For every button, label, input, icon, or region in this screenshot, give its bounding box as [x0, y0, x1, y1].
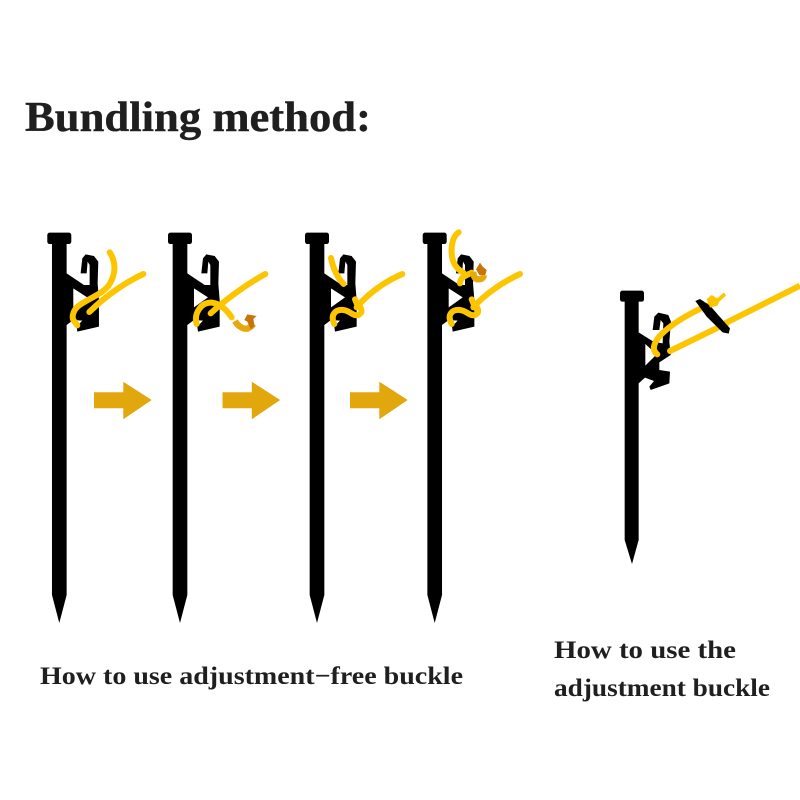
- title: Bundling method:: [25, 95, 371, 141]
- stake: adjustment buckle: [620, 291, 671, 564]
- arrow 2: [222, 382, 280, 419]
- rope: step 2: [196, 274, 265, 329]
- rope: adjustment buckle: [654, 286, 800, 354]
- rope: step 1: [73, 252, 143, 325]
- rope: step 4: [450, 232, 520, 324]
- step 3: stake with rope: [305, 233, 402, 623]
- tensioner disc: [695, 299, 730, 334]
- caption: adjustment buckle: How to use the: [554, 637, 736, 664]
- caption: adjustment-free buckle: How to use adjustment−free buckle: [40, 663, 463, 690]
- arrow 3: [350, 382, 408, 419]
- step 1: stake with rope: [47, 233, 143, 623]
- rope: step 3: [331, 258, 402, 324]
- step 4: stake with rope: [423, 232, 520, 623]
- adjustment buckle stake with rope: [620, 286, 800, 564]
- arrow 1: [94, 382, 152, 419]
- step 2: stake with rope: [168, 233, 265, 623]
- caption: adjustment buckle: adjustment buckle: [554, 675, 770, 702]
- rope knot: [707, 292, 726, 308]
